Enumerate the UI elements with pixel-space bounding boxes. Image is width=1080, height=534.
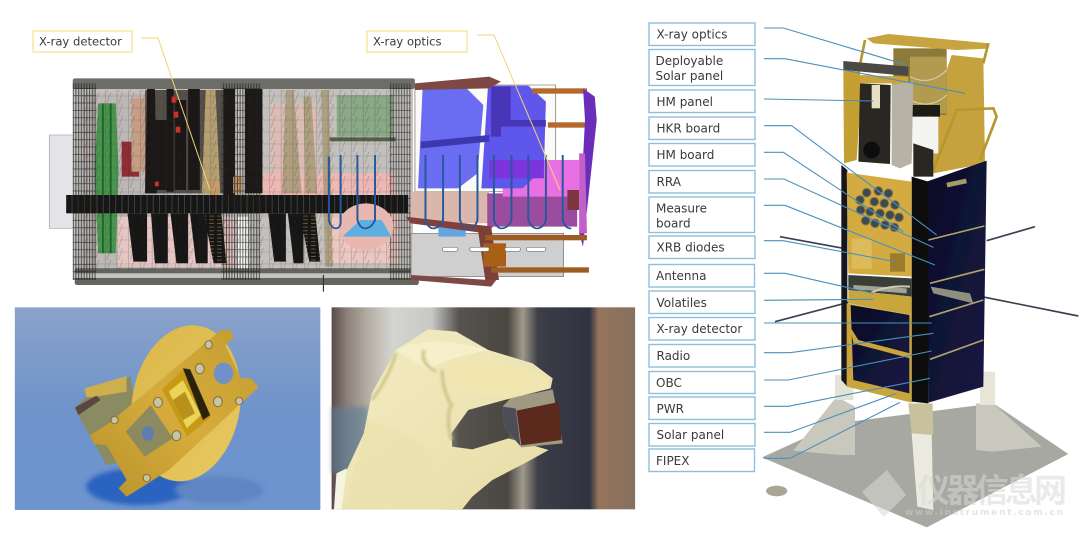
photo: gold-plated X-ray optics module on blue background — [15, 307, 320, 510]
watermark: www.instrument.com.cn — [905, 508, 1063, 518]
base plate — [762, 403, 1068, 527]
label: Solar panel — [649, 424, 755, 446]
label: Deployable Solar panel: Deployable — [656, 54, 723, 68]
label: X-ray detector — [649, 318, 755, 340]
label: X-ray detector: X-ray detector — [656, 322, 742, 336]
label: X-ray optics — [649, 23, 755, 46]
antennas — [775, 227, 1078, 322]
label: Volatiles — [649, 291, 755, 314]
watermark — [862, 464, 1067, 518]
label: XRB diodes: XRB diodes — [656, 240, 725, 254]
label: FIPEX: FIPEX — [656, 454, 689, 468]
photo: satellite on its stand — [762, 28, 1078, 527]
label: HKR board: HKR board — [656, 122, 720, 136]
label: PWR: PWR — [656, 402, 684, 416]
front gold face — [847, 173, 912, 277]
lower front solar panel — [847, 303, 912, 403]
label: RRA: RRA — [656, 175, 682, 189]
label: Deployable Solar panel — [649, 50, 755, 86]
coin — [766, 486, 787, 496]
label: Deployable Solar panel: Solar panel — [656, 69, 723, 83]
label: Antenna — [649, 264, 754, 287]
label: Radio — [649, 344, 755, 367]
label: Volatiles: Volatiles — [656, 296, 707, 310]
label: Measure board: board — [656, 216, 691, 230]
electronics gap — [848, 275, 912, 297]
retro-reflector array — [856, 187, 903, 232]
upper deployable section — [933, 55, 985, 173]
label: HM board: HM board — [656, 148, 714, 162]
panel: CAD cross-section of the satellite — [33, 31, 597, 292]
label: XRB diodes — [649, 236, 755, 258]
label: Measure board — [649, 197, 754, 232]
label: RRA — [649, 170, 755, 193]
callout: X-ray optics: X-ray optics — [373, 34, 442, 48]
label: Measure board: Measure — [656, 202, 707, 216]
component label list — [649, 23, 755, 472]
callout: X-ray detector: X-ray detector — [39, 34, 122, 48]
photo: gloved hand holding the X-ray detector — [332, 307, 635, 509]
label: Radio: Radio — [656, 349, 690, 363]
watermark: 仪器信息网 — [917, 464, 1067, 512]
stand struts — [793, 372, 1042, 510]
icon: watermark diamond logo — [862, 470, 906, 517]
callout: X-ray optics — [367, 31, 560, 190]
solar panels right face — [927, 161, 987, 403]
CAD drawing — [49, 77, 597, 292]
label: PWR — [649, 397, 755, 420]
label: HM panel: HM panel — [656, 95, 713, 109]
label: OBC: OBC — [656, 376, 682, 390]
label: Antenna: Antenna — [656, 269, 706, 283]
label: Solar panel: Solar panel — [656, 428, 724, 442]
label: OBC — [649, 372, 755, 394]
leader lines — [764, 28, 965, 458]
black corner columns — [912, 177, 928, 403]
label: HM board — [649, 144, 755, 166]
label: HKR board — [649, 117, 755, 140]
label: HM panel — [649, 90, 755, 112]
label: X-ray optics: X-ray optics — [656, 28, 728, 42]
callout: X-ray detector — [33, 31, 210, 190]
label: FIPEX — [649, 449, 754, 472]
